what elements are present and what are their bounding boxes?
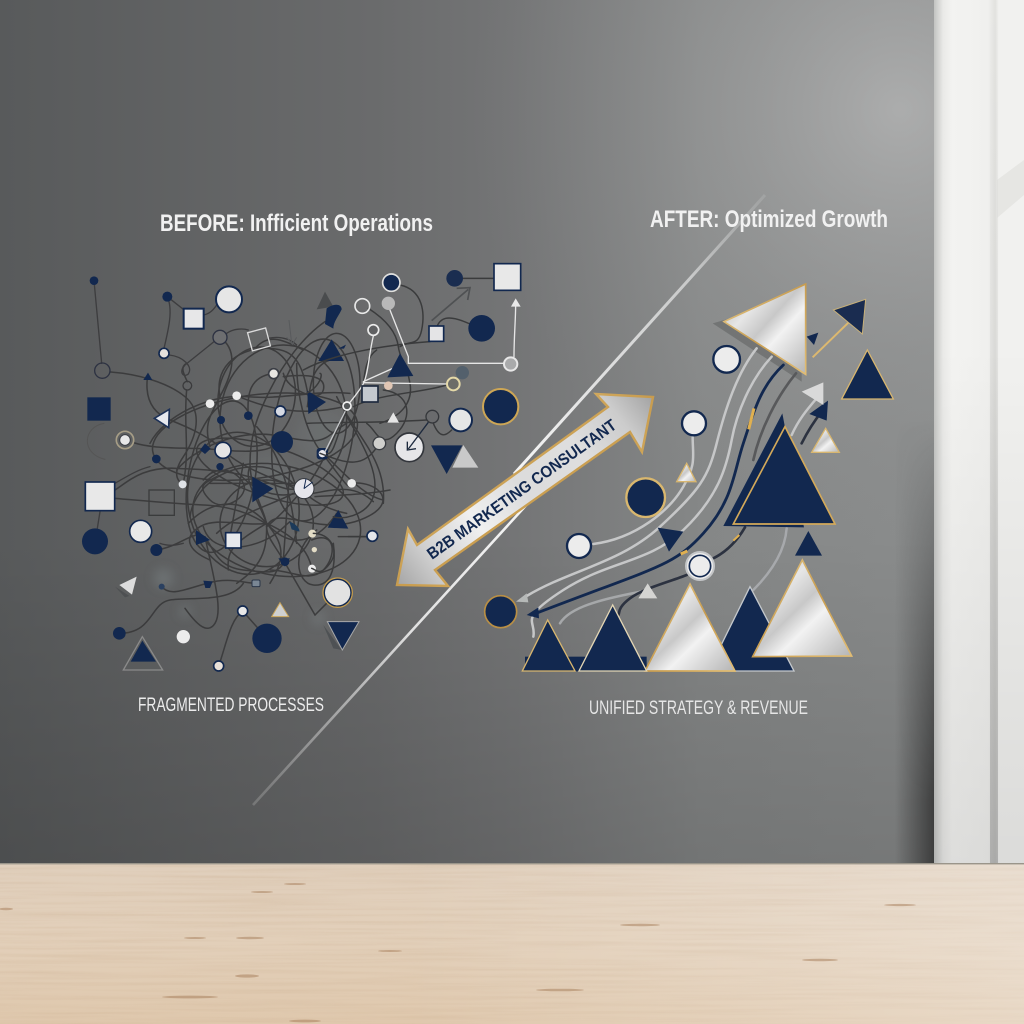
big navy triangle back xyxy=(723,413,804,527)
node: white square xyxy=(226,533,241,548)
navy circle gold ring xyxy=(626,478,665,517)
node: white circle xyxy=(449,409,472,431)
node: white big square xyxy=(494,264,521,290)
caption: unified strategy and revenue: UNIFIED STRATEGY & REVENUE xyxy=(589,698,808,719)
node: inverted navy triangle xyxy=(323,622,359,650)
node: navy dot xyxy=(162,292,172,302)
grey flow lines xyxy=(527,348,817,637)
node: navy circle white ring xyxy=(383,274,400,291)
circle middle xyxy=(682,411,706,435)
node: small square fragment xyxy=(252,580,260,587)
node: faint dot xyxy=(456,366,469,379)
diagonal divider line xyxy=(253,195,765,805)
node: white ring xyxy=(355,299,370,313)
node: navy circle xyxy=(446,270,463,287)
caption: fragmented processes: FRAGMENTED PROCESSES xyxy=(138,695,324,716)
central double arrow with label xyxy=(397,394,653,586)
arrow: dark and navy scattered arrowhead xyxy=(317,292,346,349)
node: hollow square xyxy=(149,490,174,515)
node: white ring xyxy=(368,325,379,335)
node: white circle large xyxy=(215,442,231,458)
dark flow lines xyxy=(532,365,822,615)
window light strip xyxy=(934,0,1024,864)
small silver triangle lower xyxy=(638,583,657,598)
loose upper-left links xyxy=(87,281,297,545)
node: circles with outlines xyxy=(214,369,286,671)
node: navy smudge xyxy=(289,522,299,532)
arrow: ghost arrow xyxy=(287,320,297,344)
node: square xyxy=(362,386,378,402)
arrow: dark grey xyxy=(432,288,470,321)
small silver triangle on flow xyxy=(677,463,696,482)
node: navy square xyxy=(87,397,111,421)
node: navy dot xyxy=(90,276,98,285)
arrowheads on flow lines xyxy=(516,333,828,618)
node: small white triangle xyxy=(387,412,399,423)
navy triangle back base xyxy=(708,587,794,671)
node: navy ring with white centre xyxy=(317,448,328,459)
node: small navy triangles xyxy=(143,373,290,588)
large silver triangle right xyxy=(753,560,852,657)
node: circle with tan ring xyxy=(116,431,134,449)
node: white circle xyxy=(130,520,152,542)
chart: tangled network (before) xyxy=(82,276,390,671)
node: white left triangle xyxy=(154,409,169,428)
node: outlined navy triangle xyxy=(123,637,163,670)
node: navy triangles xyxy=(196,339,348,545)
navy circle bottom left xyxy=(485,596,517,628)
small silver triangle xyxy=(802,382,823,405)
node: grey circle xyxy=(373,437,386,450)
node: small square xyxy=(429,326,444,341)
heading: before: BEFORE: Infficient Operations xyxy=(160,210,433,237)
silver triangle centre xyxy=(645,584,735,671)
node: navy small dots xyxy=(113,411,289,640)
navy base band xyxy=(525,657,647,671)
node: tilted hollow square xyxy=(248,328,270,351)
white connector lines xyxy=(325,303,516,452)
node: small ring xyxy=(183,381,192,390)
wall background xyxy=(0,0,936,866)
node: beige blobs xyxy=(308,530,317,552)
node: white triangle with shadow xyxy=(115,577,137,597)
circle left xyxy=(567,534,591,558)
circle top xyxy=(713,346,740,373)
node: white big square xyxy=(85,482,115,511)
navy flow triangle xyxy=(658,528,683,552)
node: navy outlined circle xyxy=(367,531,378,541)
node: navy circle xyxy=(468,315,495,342)
node: navy gold circle xyxy=(483,389,518,424)
navy triangle top right xyxy=(833,299,866,334)
node: dark ring xyxy=(426,410,439,423)
node: ring xyxy=(95,363,110,378)
node: white dots xyxy=(177,391,356,643)
node: white square xyxy=(184,309,204,329)
node: grey ring xyxy=(504,357,517,371)
small navy triangle xyxy=(795,531,822,556)
circle centre with double ring xyxy=(686,552,714,580)
small silver gold triangle xyxy=(812,428,839,452)
gold accents on flow xyxy=(681,408,754,554)
arrow: white up arrowhead xyxy=(511,298,521,307)
node: white triangle xyxy=(452,445,478,468)
big navy triangle front xyxy=(733,427,835,524)
node: navy large circles xyxy=(82,431,293,653)
faint decorative smudges xyxy=(153,410,350,625)
tangled connector lines xyxy=(111,322,390,666)
node: ring xyxy=(213,330,227,344)
node: gold ring xyxy=(447,378,460,390)
big silver triangle xyxy=(724,284,806,374)
navy triangle right xyxy=(842,350,893,399)
heading: after: AFTER: Optimized Growth xyxy=(650,206,888,233)
gold arrow line to navy triangle xyxy=(813,323,848,357)
node: peach blob xyxy=(384,381,393,390)
node: white circle xyxy=(216,286,242,312)
chart: unified growth (after) xyxy=(485,284,893,671)
wooden table xyxy=(0,863,1024,1024)
node: gold-ringed circle xyxy=(323,578,352,607)
arrow label: B2B MARKETING CONSULTANT xyxy=(424,416,620,563)
node: navy triangle xyxy=(387,353,413,377)
navy triangle left xyxy=(522,620,575,671)
node: inverted navy triangle xyxy=(431,445,462,474)
node: white ring xyxy=(343,402,351,410)
node: grey circle xyxy=(382,297,395,310)
node: small circle xyxy=(159,348,169,358)
dark connector lines xyxy=(303,278,493,571)
silver triangle shadow xyxy=(713,318,802,382)
navy triangle xyxy=(579,605,647,671)
chart: network converging (before, right part) xyxy=(303,264,521,571)
node: pie circle xyxy=(294,479,314,499)
node: silver gold triangle xyxy=(272,603,289,617)
node: white clock circle with arrow xyxy=(395,422,428,462)
